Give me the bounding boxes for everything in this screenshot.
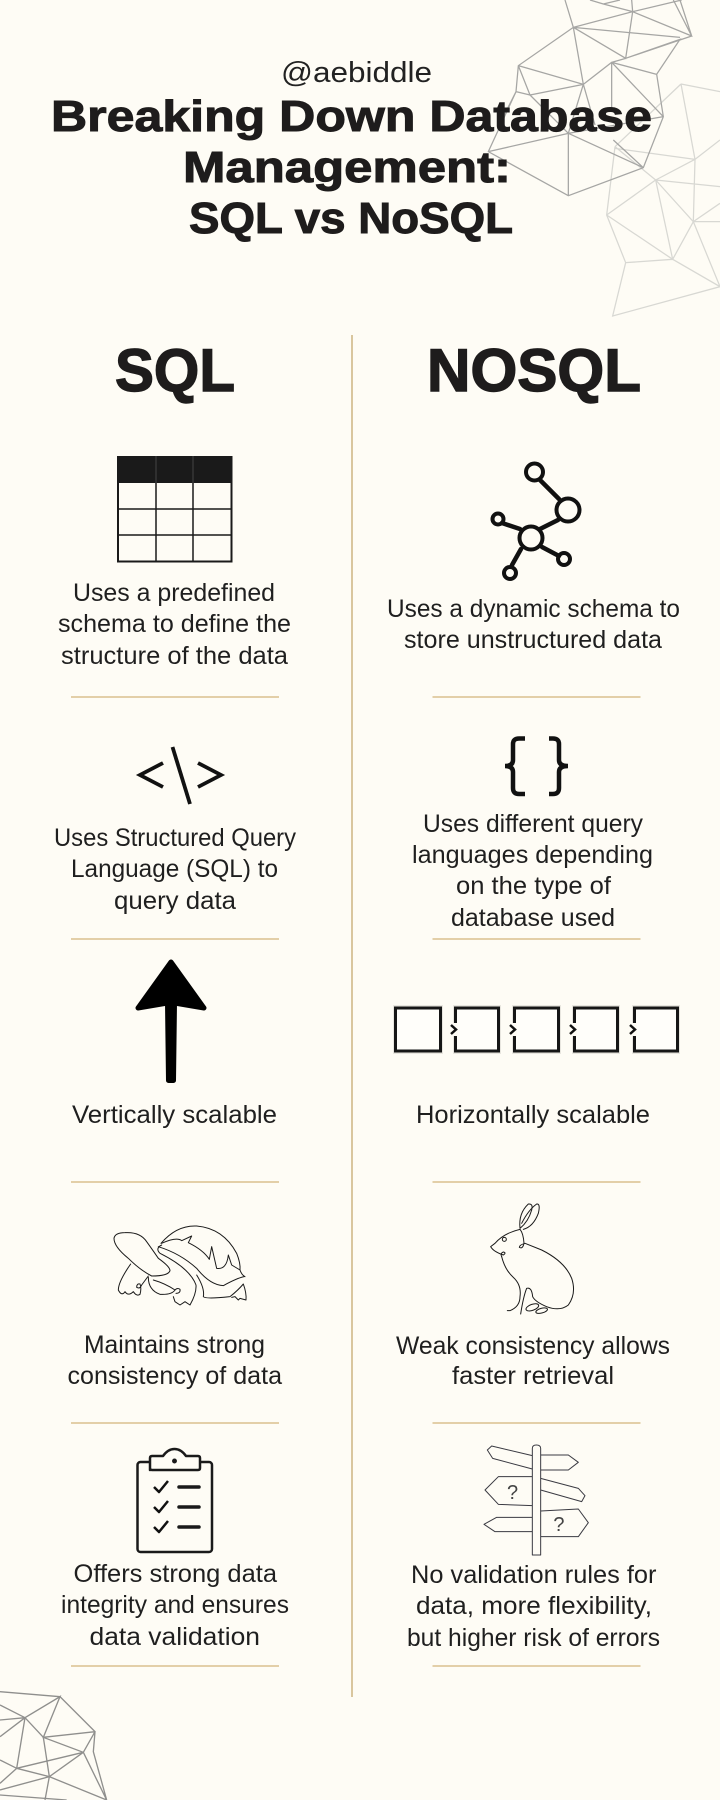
question marks: ? <box>507 1482 518 1504</box>
text: data integrity: Offers strong data <box>74 1560 277 1588</box>
title <box>51 92 652 243</box>
divider 2 <box>432 938 640 940</box>
title: Breaking Down Database <box>51 92 652 141</box>
decoration: light polygon network, top right <box>607 84 720 316</box>
divider 3 <box>71 1181 279 1183</box>
text: weak consistency <box>396 1332 670 1390</box>
column: SQL <box>54 337 296 1666</box>
text: vertically scalable: Vertically scalable <box>72 1101 277 1129</box>
icon: code brackets <box>140 747 221 804</box>
decoration: polygon network, bottom left <box>0 1692 107 1800</box>
text: strong consistency <box>68 1331 282 1390</box>
text: query languages: languages depending <box>412 841 653 869</box>
text: predefined schema: structure of the data <box>61 642 288 670</box>
text: structured query language: query data <box>114 887 236 915</box>
text: data integrity: data validation <box>90 1623 260 1651</box>
heading: NOSQL: NOSQL <box>427 337 641 404</box>
icon: up arrow <box>138 962 204 1080</box>
column: NoSQL <box>387 337 680 1666</box>
text: query languages <box>412 810 653 932</box>
icon: clipboard checklist <box>138 1449 212 1552</box>
icon: rabbit line drawing <box>491 1204 574 1314</box>
text: weak consistency: faster retrieval <box>452 1362 614 1390</box>
icon: horizontal boxes <box>394 1006 679 1053</box>
text: data integrity: integrity and ensures <box>61 1591 289 1619</box>
text: dynamic schema: store unstructured data <box>404 626 662 654</box>
text: predefined schema: Uses a predefined <box>73 579 275 607</box>
divider 1 <box>432 696 640 698</box>
text: horizontally scalable: Horizontally scalable <box>416 1101 650 1129</box>
text: no validation rules: but higher risk of errors <box>407 1624 660 1652</box>
text: predefined schema: schema to define the <box>58 610 291 638</box>
title: Management: <box>183 143 511 192</box>
text: weak consistency: Weak consistency allows <box>396 1332 670 1360</box>
divider 5 <box>432 1665 640 1667</box>
icon: network nodes <box>492 464 580 579</box>
divider 5 <box>71 1665 279 1667</box>
text: query languages: on the type of <box>456 872 611 900</box>
divider 4 <box>432 1422 640 1424</box>
divider 2 <box>71 938 279 940</box>
icon: curly braces <box>505 738 568 794</box>
text: dynamic schema: Uses a dynamic schema to <box>387 595 680 623</box>
divider 4 <box>71 1422 279 1424</box>
decoration: dark polygon network, top right <box>488 0 692 196</box>
text: strong consistency: Maintains strong <box>84 1331 265 1359</box>
title: SQL vs NoSQL <box>189 194 513 243</box>
text: query languages: database used <box>451 904 615 932</box>
divider 1 <box>71 696 279 698</box>
question marks: ? <box>553 1514 564 1536</box>
text: no validation rules: data, more flexibility, <box>416 1592 652 1620</box>
icon: signpost with question marks <box>484 1445 588 1555</box>
heading: SQL: SQL <box>115 337 235 404</box>
divider 3 <box>432 1181 640 1183</box>
text: structured query language: Uses Structured Query <box>54 824 296 852</box>
text: no validation rules: No validation rules for <box>411 1561 656 1589</box>
text: structured query language: Language (SQL) to <box>71 855 278 883</box>
text: structured query language <box>54 824 296 915</box>
column divider <box>351 335 353 1697</box>
text: query languages: Uses different query <box>423 810 643 838</box>
icon: tortoise line drawing <box>114 1226 246 1305</box>
icon: table <box>117 456 232 562</box>
text: strong consistency: consistency of data <box>68 1362 282 1390</box>
text: predefined schema <box>58 579 291 670</box>
text: data integrity <box>61 1560 289 1651</box>
question marks <box>507 1482 564 1536</box>
text: no validation rules <box>407 1561 660 1652</box>
handle: @aebiddle <box>281 57 432 89</box>
text: dynamic schema <box>387 595 680 654</box>
